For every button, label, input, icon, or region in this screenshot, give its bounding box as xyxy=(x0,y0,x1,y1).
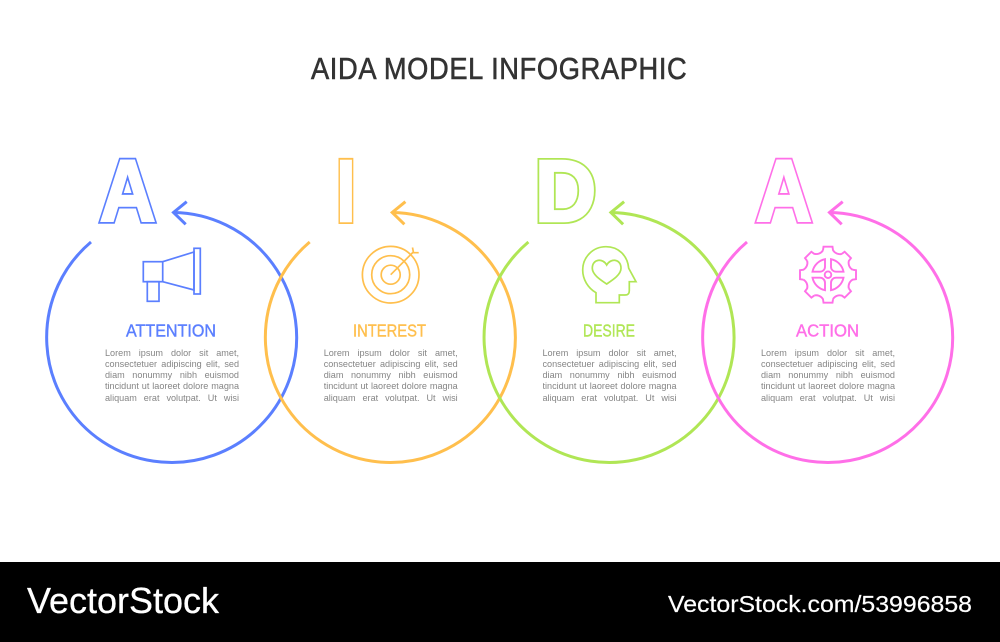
body text: aliquam erat volutpat. Ut wisi xyxy=(324,392,458,402)
circle arrow xyxy=(265,202,515,462)
body text: Lorem ipsum dolor sit amet, xyxy=(761,348,895,358)
icon: gear xyxy=(798,245,858,304)
footer url text: VectorStock.com/53996858 xyxy=(668,591,972,617)
icon: target xyxy=(362,246,419,303)
body text xyxy=(324,348,460,406)
icon: head with heart xyxy=(583,247,636,303)
body text: diam nonummy nibh euismod xyxy=(542,370,676,380)
body text: Lorem ipsum dolor sit amet, xyxy=(324,348,458,358)
letter I: I xyxy=(336,143,356,240)
circle arrow xyxy=(484,202,734,462)
heading: ATTENTION xyxy=(126,320,216,340)
icon: megaphone xyxy=(143,248,200,301)
title: AIDA MODEL INFOGRAPHIC xyxy=(311,52,687,86)
panel: desire xyxy=(484,143,734,462)
circle arrow xyxy=(47,202,297,462)
circle arrow xyxy=(703,202,953,462)
body text: tincidunt ut laoreet dolore magna xyxy=(761,381,895,391)
letter D: D xyxy=(535,143,596,240)
body text: tincidunt ut laoreet dolore magna xyxy=(105,381,239,391)
footer logo text: VectorStock xyxy=(27,580,220,621)
letter A: A xyxy=(756,144,812,240)
heading: INTEREST xyxy=(353,320,426,340)
heading: DESIRE xyxy=(583,320,635,340)
panel: action xyxy=(703,144,953,462)
footer bar xyxy=(0,562,1000,642)
body text: diam nonummy nibh euismod xyxy=(761,370,895,380)
body text: consectetuer adipiscing elit, sed xyxy=(761,359,895,369)
letter D: D xyxy=(535,143,596,240)
body text xyxy=(105,348,241,406)
body text: aliquam erat volutpat. Ut wisi xyxy=(761,392,895,402)
panel: attention xyxy=(47,144,297,462)
body text: aliquam erat volutpat. Ut wisi xyxy=(105,392,239,402)
body text: tincidunt ut laoreet dolore magna xyxy=(542,381,676,391)
letter I: I xyxy=(336,143,356,240)
panel: interest xyxy=(265,143,515,462)
body text: consectetuer adipiscing elit, sed xyxy=(324,359,458,369)
letter A: A xyxy=(100,144,155,240)
letter A: A xyxy=(756,144,812,240)
body text: diam nonummy nibh euismod xyxy=(105,370,239,380)
body text xyxy=(761,348,897,406)
body text: consectetuer adipiscing elit, sed xyxy=(542,359,676,369)
body text: diam nonummy nibh euismod xyxy=(324,370,458,380)
body text: Lorem ipsum dolor sit amet, xyxy=(542,348,676,358)
body text: aliquam erat volutpat. Ut wisi xyxy=(542,392,676,402)
letter A: A xyxy=(100,144,155,240)
body text xyxy=(542,348,678,406)
body text: tincidunt ut laoreet dolore magna xyxy=(324,381,458,391)
heading: ACTION xyxy=(796,320,859,340)
body text: consectetuer adipiscing elit, sed xyxy=(105,359,239,369)
body text: Lorem ipsum dolor sit amet, xyxy=(105,348,239,358)
